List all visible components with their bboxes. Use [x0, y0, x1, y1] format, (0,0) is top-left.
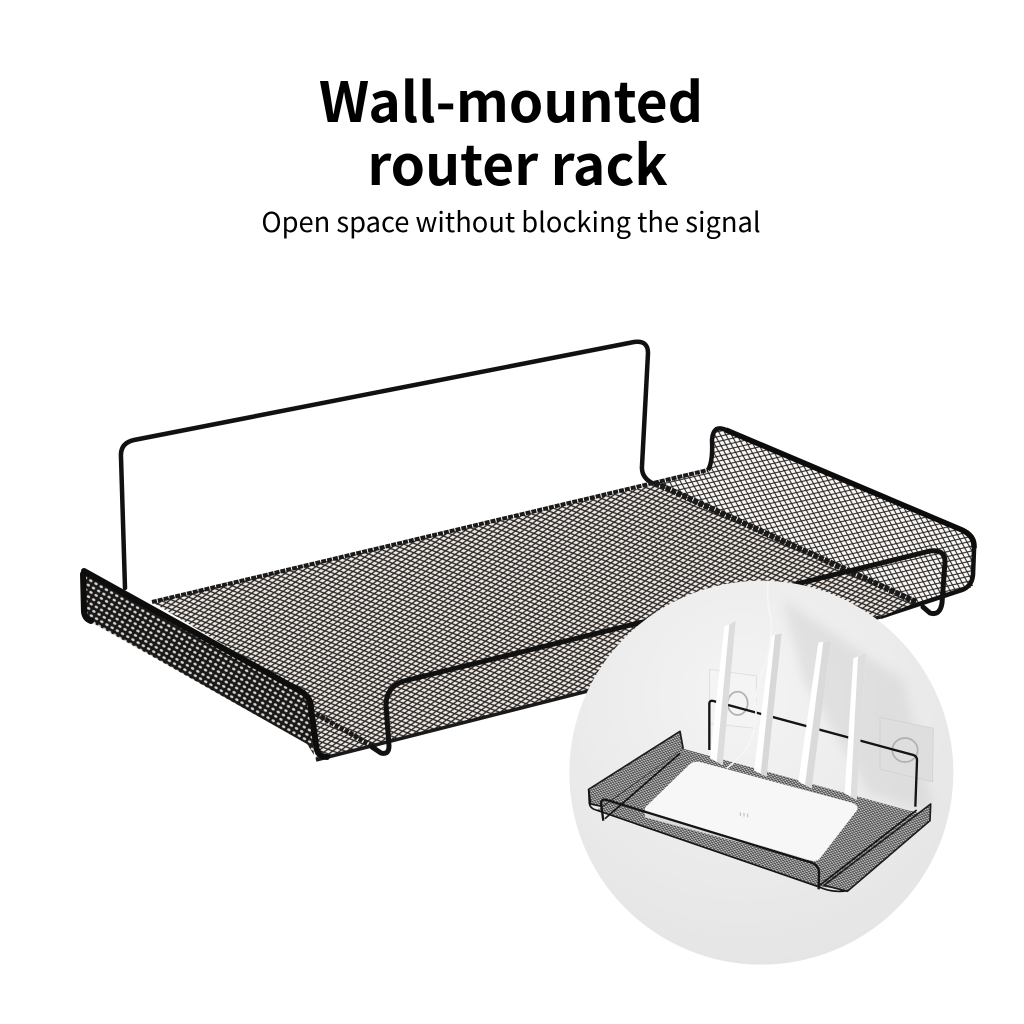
- router body: [645, 762, 858, 861]
- rack left wall: [589, 731, 683, 807]
- main product: mesh router rack: [83, 342, 974, 760]
- router logo mark: [740, 812, 748, 817]
- front wire frame: [372, 551, 945, 753]
- adhesive plate: left: [709, 669, 757, 728]
- rack front wire: [601, 800, 819, 889]
- rack floor: [596, 749, 923, 888]
- mesh floor: [152, 485, 915, 760]
- router lower edge: [645, 813, 812, 861]
- antennas: [710, 621, 866, 800]
- right mesh wall: [653, 427, 974, 617]
- adhesive plate: right: [880, 717, 933, 782]
- wall shadow: [787, 608, 928, 808]
- rack right wall: [824, 804, 931, 891]
- floor edges: [152, 470, 916, 760]
- infographic canvas: [80, 78, 977, 964]
- left mesh wall: [83, 571, 327, 757]
- wall hooks: [728, 692, 918, 762]
- wall background circle: [569, 581, 953, 965]
- rack lower edges: [589, 753, 917, 891]
- title: router rack: [367, 121, 668, 201]
- back wire frame: [121, 342, 654, 588]
- rack back wire: [709, 701, 917, 807]
- title: [319, 58, 703, 201]
- cable: [727, 582, 771, 768]
- title: Wall-mounted: [319, 58, 703, 138]
- inset photo: rack mounted on wall with router: [569, 581, 953, 965]
- subtitle: Open space without blocking the signal: [261, 200, 761, 240]
